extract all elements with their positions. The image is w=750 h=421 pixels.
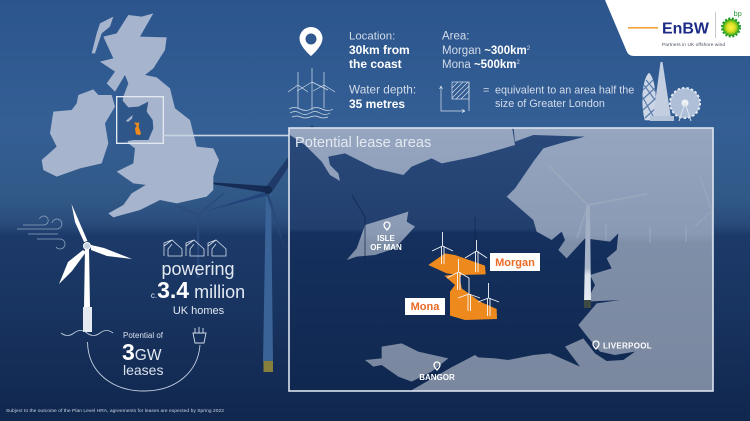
- text: location: [349, 30, 410, 71]
- stat: 3GW leases: 3GW: [122, 339, 162, 365]
- Isle of Man small: [126, 115, 133, 122]
- place: Bangor: [419, 362, 455, 382]
- logo panel: [605, 0, 750, 56]
- logo: EnBW line: [628, 27, 658, 29]
- stat: powering homes: powering: [161, 259, 235, 279]
- icon: area square: [440, 82, 469, 112]
- connector line to panel: [163, 135, 289, 136]
- logo strapline: Partners in UK offshore wind: [662, 42, 725, 48]
- land: Anglesey: [365, 343, 448, 382]
- lease area marker: [134, 123, 141, 135]
- icon: London Eye: [670, 88, 700, 118]
- icon: offshore turbines: [288, 68, 335, 118]
- panel: potential lease areas: [288, 125, 733, 395]
- text: location: 30km from: [349, 43, 410, 57]
- icon: plug: [193, 327, 206, 343]
- panel border: [289, 128, 713, 391]
- icon: Shard: [653, 62, 671, 118]
- label: Morgan: Morgan: [495, 257, 535, 269]
- label: Mona: [405, 298, 445, 315]
- place: Isle of Man: [370, 222, 402, 252]
- land: England coast: [412, 125, 733, 395]
- heading: Potential lease areas: [295, 135, 431, 151]
- place: Bangor: BANGOR: [419, 373, 455, 382]
- Morgan lease area: [428, 253, 486, 275]
- place: Isle of Man: OF MAN: [370, 243, 402, 252]
- wind turbines on lease areas: [432, 232, 499, 316]
- icon: large white turbine: [59, 204, 132, 332]
- text: area: Mona ~500km: [442, 59, 516, 71]
- text: location: the coast: [349, 57, 402, 71]
- stat: 3GW leases: Potential of: [123, 331, 164, 340]
- text: area: [442, 30, 531, 71]
- place: Liverpool: LIVERPOOL: [603, 342, 652, 350]
- stat: 3GW leases: [122, 331, 164, 378]
- text: area: Area:: [442, 30, 470, 42]
- text: area: 2: [516, 60, 520, 66]
- arc cable: [88, 342, 200, 391]
- place: Isle of Man: ISLE: [377, 234, 396, 243]
- icon: waves: [61, 330, 113, 336]
- logo: bp helios: [722, 19, 740, 36]
- text: London equivalent: [483, 84, 634, 110]
- label: Mona: Mona: [411, 301, 440, 313]
- icon: wind lines: [17, 216, 65, 249]
- stat: powering homes: UK homes: [173, 305, 225, 317]
- Ireland: [42, 89, 115, 177]
- Mona lease area: [444, 274, 497, 320]
- map: UK and Ireland: [42, 13, 219, 217]
- land: Scotland coast: [288, 125, 733, 395]
- Great Britain: [100, 13, 219, 217]
- background turbine behind map: [175, 193, 224, 278]
- ghost turbines over panel: [352, 165, 713, 308]
- text: London equivalent: equivalent to an area half the: [495, 84, 634, 96]
- logo: bp wordmark: bp: [734, 9, 742, 18]
- Hebrides: [92, 17, 113, 53]
- stat: powering homes: [151, 259, 245, 317]
- text: area: Morgan ~300km: [442, 45, 527, 57]
- background large turbine: [176, 125, 314, 372]
- text: London equivalent: =: [483, 84, 489, 96]
- icon: location pin: [300, 27, 322, 56]
- stat: powering homes: c.3.4 million: [151, 277, 245, 303]
- text: area: 2: [527, 46, 531, 52]
- footnote: Subject to the outcome of the Plan Level HRA, agreements for leases are expected by Spring 2022: [6, 408, 224, 414]
- icon: London skyline: [642, 62, 700, 121]
- label: Morgan: [490, 253, 540, 271]
- land: Isle of Man: [347, 212, 415, 260]
- inset locator box: [117, 97, 163, 143]
- text: water depth: [349, 82, 416, 111]
- icon: homes: [164, 240, 226, 256]
- text: location: Location:: [349, 30, 395, 42]
- logo divider: [715, 12, 716, 38]
- logo: EnBW: EnBW: [662, 20, 709, 38]
- text: water depth: Water depth:: [349, 82, 416, 96]
- text: water depth: 35 metres: [349, 97, 405, 111]
- Irish Sea inset: [117, 97, 153, 143]
- stat: 3GW leases: leases: [123, 362, 163, 378]
- text: London equivalent: size of Greater London: [495, 98, 605, 110]
- icon: Gherkin: [643, 73, 656, 120]
